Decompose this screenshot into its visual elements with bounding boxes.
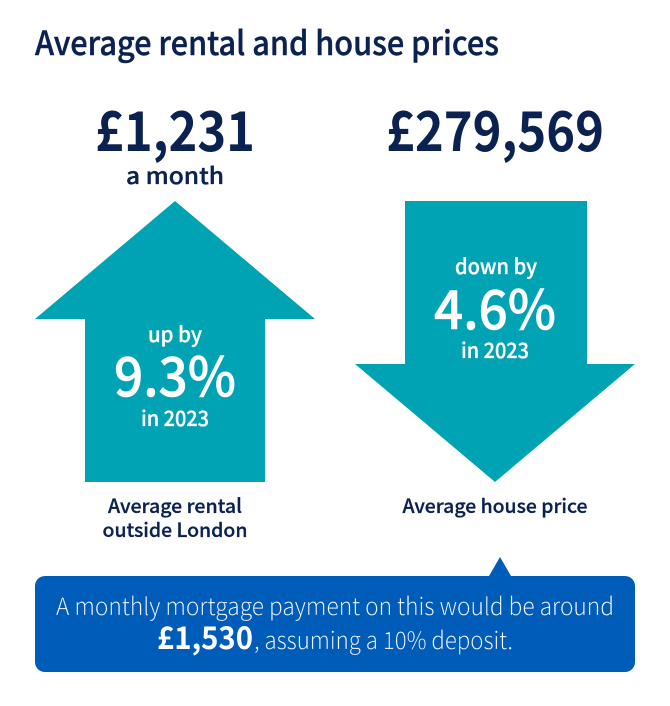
panel: house price	[355, 87, 635, 519]
house price caption: Average house price	[402, 490, 588, 519]
icon: down arrow	[355, 201, 635, 482]
up by label: up by	[148, 319, 203, 349]
callout amount: £1,530	[157, 613, 253, 658]
title: Average rental and house prices	[35, 17, 499, 65]
house price change: 4.6%	[434, 266, 556, 345]
icon: up arrow	[35, 201, 315, 482]
callout	[35, 557, 635, 672]
callout line 2: , assuming a 10% deposit.	[254, 621, 513, 656]
rental year: in 2023	[141, 403, 209, 433]
rental value: £1,231	[95, 87, 255, 167]
down by label: down by	[455, 251, 538, 281]
rental caption line 2: outside London	[102, 514, 248, 543]
house price value: £279,569	[386, 87, 604, 167]
callout line 1: A monthly mortgage payment on this would be around	[56, 587, 614, 622]
rental caption: Average rental	[108, 490, 242, 519]
rental change: 9.3%	[114, 333, 236, 412]
panel: rental	[35, 87, 315, 543]
rental unit: a month	[126, 157, 224, 191]
house price year: in 2023	[461, 335, 529, 365]
callout box	[35, 557, 635, 672]
